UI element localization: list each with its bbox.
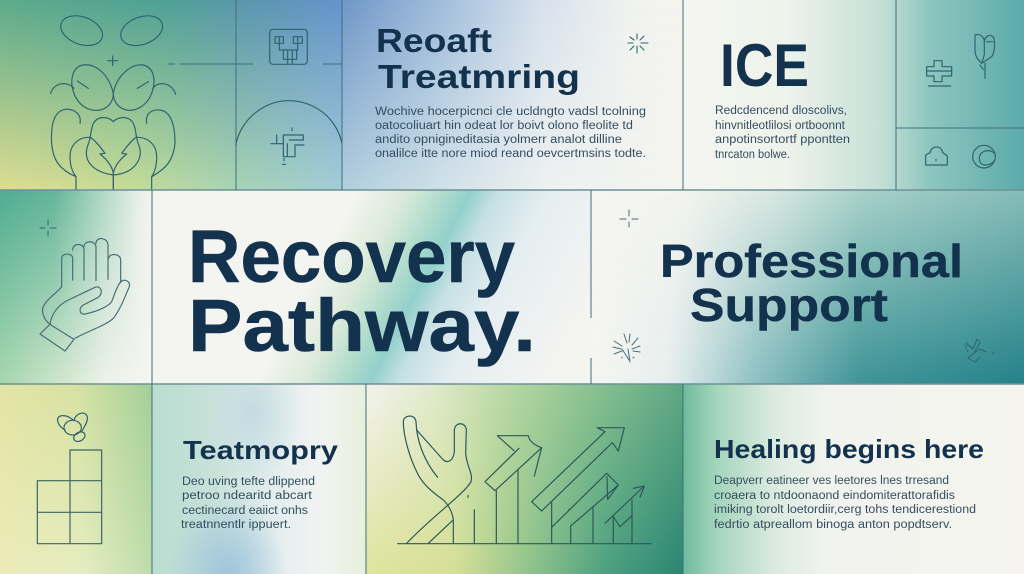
heading: Support	[690, 279, 888, 331]
heading	[376, 22, 580, 95]
title: Recovery	[188, 215, 515, 298]
heading: Reoaft	[376, 22, 492, 59]
heading: Treatmring	[378, 58, 580, 95]
text block: Redcdencend dloscolivs,	[715, 105, 847, 117]
panel: Healing begins here	[683, 384, 1024, 574]
arrow 2	[532, 428, 624, 543]
panel: blocks and pills	[0, 384, 152, 574]
icon: sparkle	[628, 34, 648, 53]
icon: burst	[613, 334, 640, 362]
illustration: embracing figures	[51, 10, 176, 195]
icon: squiggle	[966, 339, 994, 362]
text block: tnrcaton bolwe.	[715, 149, 790, 161]
text block: Deapverr eatineer ves leetores lnes trresand	[714, 475, 949, 487]
panel: top-left illustration	[0, 0, 342, 190]
panel: Professional Support	[591, 190, 1024, 384]
text block: petroo ndearitd abcart	[182, 490, 313, 502]
text block: oatocoliuart hin odeat lor boivt olono fleolite td	[375, 120, 633, 132]
text block	[715, 105, 850, 161]
text block: croaera to ntdoonaond eindomiterattorafidis	[714, 490, 955, 502]
arrow 1	[485, 436, 542, 543]
heading: ICE	[720, 32, 809, 99]
icon: rounded glyph	[926, 147, 947, 165]
title	[188, 215, 536, 367]
icon: stacked blocks	[37, 450, 102, 544]
icon: crosshair sparkle	[620, 210, 638, 227]
heading: Teatmopry	[183, 435, 339, 465]
text block: treatnnentlr ippuert.	[181, 519, 291, 531]
hand	[403, 416, 474, 543]
icon: circle glyph	[973, 145, 995, 168]
icon: arch with glyph	[236, 101, 342, 164]
title: Pathway.	[188, 284, 536, 367]
arrow 3	[552, 473, 618, 543]
panel: Recovery Pathway title	[152, 190, 591, 384]
text block	[714, 475, 976, 531]
panel: ICE and icons	[683, 0, 1024, 190]
text block: onalilce itte nore miod reand oevcertmsins todte.	[375, 148, 646, 160]
text block: Wochive hocerpicnci cle ucldngto vadsl tcolning	[375, 106, 646, 118]
arrow 4	[605, 486, 644, 543]
text block: Deo uving tefte dlippend	[182, 476, 315, 488]
text block	[181, 476, 315, 531]
panel: hand	[0, 190, 152, 384]
text block: cectinecard eaiict onhs	[182, 505, 308, 517]
icon: pills	[58, 413, 87, 443]
panel: Reoaft Treatmring	[342, 0, 648, 190]
text block: anpotinsortortf ppontten	[715, 134, 850, 146]
icon: small sparkle	[40, 220, 56, 236]
text block	[375, 106, 646, 160]
icon: medical cross	[927, 61, 952, 86]
text block: hinvnitleotlilosi ortboonnt	[715, 120, 846, 132]
icon: vial	[975, 35, 995, 78]
chart baseline	[398, 542, 651, 545]
icon: open hand	[40, 239, 130, 351]
heading: Professional	[660, 235, 963, 287]
heading	[660, 235, 963, 331]
heading: Healing begins here	[714, 434, 984, 464]
panel: hand and growth arrows	[366, 384, 683, 574]
illustration: hand and rising arrows	[398, 416, 651, 544]
text block: imiking torolt loetordiir,cerg tohs tendicerestiond	[714, 504, 976, 516]
text block: fedrtio atpreallom binoga anton popdtserv.	[714, 519, 952, 531]
icon: square building glyph	[270, 29, 307, 64]
text block: andito opnigineditasia yolmerr analot dilline	[375, 134, 622, 146]
panel: Teatmopry	[152, 384, 366, 574]
